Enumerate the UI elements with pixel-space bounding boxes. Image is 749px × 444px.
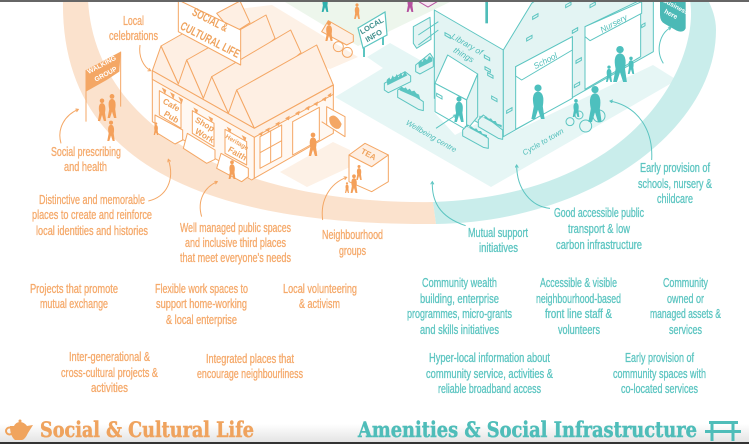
- text: well managed public spaces: [180, 221, 291, 265]
- text: early provision of schools: childcare: [657, 192, 693, 206]
- text: well managed public spaces: and inclusive third places: [185, 236, 286, 250]
- text: distinctive and memorable places: places to create and reinforce: [32, 208, 152, 222]
- window: Shop Work: [192, 111, 217, 147]
- text: early provision of schools: [638, 161, 712, 206]
- arrows: social and cultural life: [60, 45, 347, 220]
- bench and bicycle at top: [322, 21, 353, 57]
- text: good accessible public transport: carbon infrastructure: [556, 238, 642, 252]
- text: neighbourhood groups: Neighbourhood: [322, 228, 383, 242]
- text: flexible work spaces: support home-working: [156, 297, 247, 311]
- text: community wealth building: [407, 276, 512, 337]
- window: Heritage Faith: Heritage: [224, 133, 250, 152]
- cycle to town label: Cycle to town: [521, 126, 565, 157]
- icon: teapot: [6, 420, 33, 440]
- text: hyper-local information: community service, activities &: [426, 367, 553, 381]
- text: hyper-local information: reliable broadband access: [438, 382, 541, 396]
- corner window: [260, 125, 282, 168]
- roof and right wall: [503, 0, 653, 137]
- text: flexible work spaces: Flexible work spaces to: [155, 282, 248, 296]
- door: [293, 107, 319, 155]
- text: good accessible public transport: [554, 206, 644, 252]
- text: early provision of schools: Early provision of: [640, 161, 710, 175]
- text: community owned assets: Community: [663, 276, 709, 290]
- ring: social and cultural life (orange arc): [63, 0, 436, 224]
- text: accessible and visible staff: neighbourhood-based: [536, 292, 621, 306]
- text: inter-generational projects: [61, 350, 158, 395]
- text: local volunteering and activism: Local volunteering: [283, 282, 357, 296]
- window: Shop Work: Shop: [193, 115, 216, 134]
- text: accessible and visible staff: front line staff &: [545, 307, 613, 321]
- text: community wealth building: building, enterprise: [420, 292, 499, 306]
- icon: park bench: [705, 422, 741, 441]
- arrows: amenities and social infrastructure: [432, 27, 671, 226]
- text: neighbourhood groups: groups: [339, 244, 366, 258]
- text: inter-generational projects: cross-cultural projects &: [61, 366, 158, 380]
- text: projects that promote mutual exchange: mutual exchange: [40, 297, 108, 311]
- text: hyper-local information: [426, 351, 553, 396]
- window: Cafe Pub: Pub: [162, 108, 181, 125]
- text: early provision of community spaces: community spaces with: [613, 367, 706, 381]
- ground: pale green area: [285, 2, 450, 46]
- people: orange figures: [98, 3, 362, 193]
- local info sign: INFO: [364, 27, 384, 44]
- notice board: [413, 17, 438, 48]
- heading: social and cultural life: Social & Cultural Life: [40, 417, 254, 442]
- bicycles: [566, 110, 605, 132]
- front walls: [152, 71, 254, 180]
- text: hyper-local information: Hyper-local information about: [429, 351, 550, 365]
- person: teal figure at top: [322, 0, 328, 12]
- eave band with bunting: [152, 71, 333, 142]
- text: local celebrations: Local: [123, 14, 144, 28]
- walking group banner: [86, 52, 121, 122]
- entrance: wellbeing centre: [435, 55, 478, 130]
- person: purple figure at top: [407, 0, 413, 12]
- text: distinctive and memorable places: local identities and histories: [36, 224, 148, 238]
- window: Cafe Pub: Cafe: [161, 96, 182, 114]
- ground: teal paths: [335, 43, 677, 187]
- walking group banner: WALKING: [86, 55, 117, 76]
- text: flexible work spaces: [155, 282, 248, 327]
- illustration: amenities building: [384, 0, 690, 157]
- door: nursery: [585, 0, 642, 89]
- hanging sign with teapot: [322, 107, 345, 137]
- people: teal figures: [454, 46, 634, 122]
- local info sign: LOCAL: [358, 15, 386, 36]
- window: Heritage Faith: [224, 129, 250, 165]
- text: well managed public spaces: that meet everyone's needs: [180, 251, 291, 265]
- text: flexible work spaces: & local enterprise: [166, 313, 237, 327]
- back roofs: [161, 1, 301, 113]
- text: community wealth building: Community wealth: [422, 276, 497, 290]
- text: inter-generational projects: Inter-generational &: [69, 350, 150, 364]
- text: projects that promote mutual exchange: Projects that promote: [30, 282, 118, 296]
- left wall: [434, 10, 503, 137]
- text: community owned assets: services: [669, 323, 702, 337]
- text: good accessible public transport: transport & low: [568, 222, 631, 236]
- hanging sign: here: here: [663, 8, 679, 21]
- tea kiosk: TEA: [359, 147, 378, 162]
- window: Cafe Pub: [159, 91, 182, 128]
- text: integrated places: encourage neighbourliness: [197, 367, 303, 381]
- text: distinctive and memorable places: [32, 193, 152, 238]
- text: community owned assets: [650, 276, 721, 337]
- ring: amenities and social infrastructure (teal arc): [433, 0, 716, 224]
- walking group banner: GROUP: [94, 66, 119, 83]
- window: Heritage Faith: Faith: [226, 144, 249, 163]
- text: local volunteering and activism: & activism: [299, 297, 340, 311]
- purple box at top: [416, 0, 440, 7]
- text: community wealth building: programmes, micro-grants: [407, 307, 512, 321]
- text: social prescribing and health: [51, 145, 121, 174]
- text: social prescribing and health: and health: [64, 160, 107, 174]
- wellbeing centre sign and arrow: Wellbeing centre: [404, 118, 458, 154]
- library label: Library of: [450, 31, 486, 58]
- text: community owned assets: owned or: [667, 292, 704, 306]
- text: community wealth building: and skills initiatives: [420, 323, 499, 337]
- text: mutual support initiatives: initiatives: [479, 241, 518, 255]
- sign: Social and Cultural Life: [178, 0, 242, 65]
- tea kiosk: [349, 143, 388, 192]
- bottom edge line: [0, 442, 749, 444]
- text: early provision of community spaces: [613, 351, 706, 396]
- text: well managed public spaces: Well managed public spaces: [180, 221, 291, 235]
- page top edge: [0, 0, 749, 2]
- text: local celebrations: celebrations: [109, 29, 158, 43]
- planters: [384, 53, 503, 148]
- text: neighbourhood groups: [322, 228, 383, 258]
- door: nursery: Nursery: [598, 12, 630, 35]
- text: good accessible public transport: Good accessible public: [554, 206, 644, 220]
- text: integrated places: Integrated places that: [206, 352, 294, 366]
- text: mutual support initiatives: Mutual support: [468, 226, 528, 240]
- illustration: social and cultural life building: [86, 0, 388, 192]
- sign: Social and Cultural Life: CULTURAL LIFE: [178, 19, 242, 61]
- text: inter-generational projects: activities: [91, 381, 128, 395]
- pylon / post: [483, 0, 491, 23]
- text: early provision of community spaces: co-located services: [621, 382, 698, 396]
- window: Shop Work: Work: [193, 126, 217, 145]
- ground: peach paths: [230, 5, 358, 187]
- text: mutual support initiatives: [468, 226, 528, 255]
- text: early provision of community spaces: Early provision of: [625, 351, 694, 365]
- text: integrated places: [197, 352, 303, 381]
- footer shading: [0, 424, 749, 442]
- heading: amenities and social infrastructure: Amenities & Social Infrastructure: [357, 417, 697, 442]
- text: local volunteering and activism: [283, 282, 357, 311]
- local info sign: [358, 12, 387, 57]
- door: school: School: [532, 50, 560, 71]
- benches: [155, 115, 248, 182]
- sign: Social and Cultural Life: SOCIAL &: [190, 5, 231, 35]
- front roof: [237, 45, 333, 128]
- text: distinctive and memorable places: Distinctive and memorable: [39, 193, 145, 207]
- bricks: [437, 2, 645, 113]
- hanging sign: here: [660, 0, 690, 32]
- text: accessible and visible staff: Accessible & visible: [540, 276, 617, 290]
- library label: things: [452, 45, 476, 65]
- door: school: [516, 37, 572, 129]
- text: early provision of schools: schools, nursery &: [638, 177, 712, 191]
- text: accessible and visible staff: [536, 276, 621, 337]
- text: social prescribing and health: Social prescribing: [51, 145, 121, 159]
- gables: [152, 46, 254, 128]
- text: projects that promote mutual exchange: [30, 282, 118, 311]
- text: accessible and visible staff: volunteers: [558, 323, 600, 337]
- text: local celebrations: [109, 14, 158, 43]
